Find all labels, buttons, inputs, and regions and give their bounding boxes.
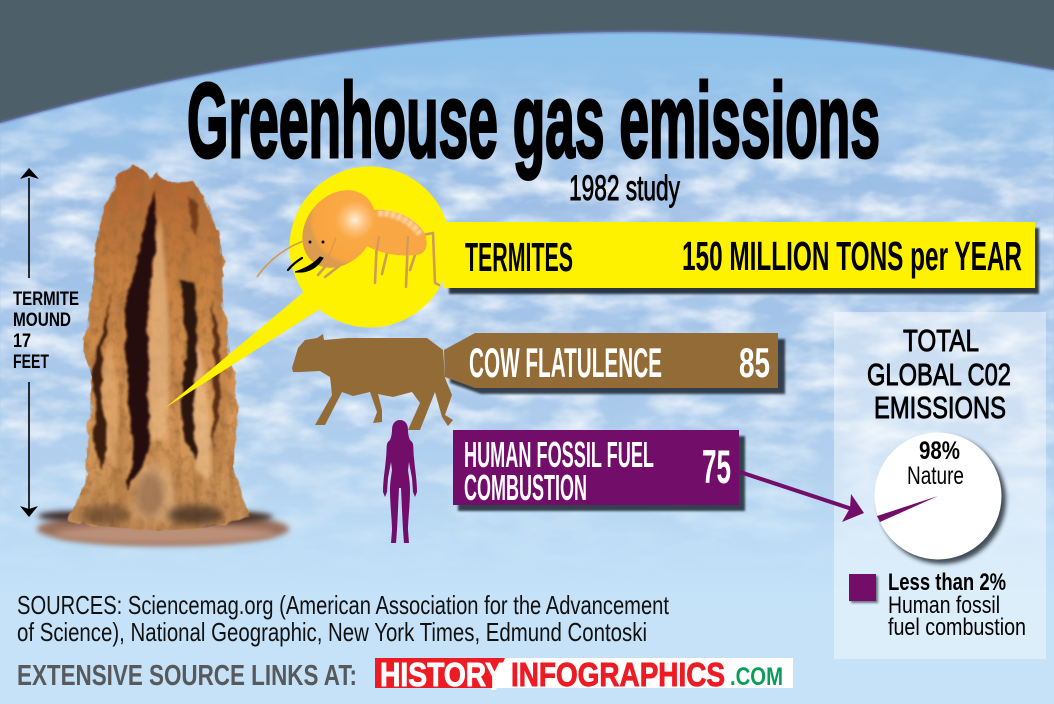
legend: Less than 2% [888, 569, 1006, 596]
mound height label: FEET [13, 352, 49, 373]
base shadow [136, 473, 164, 517]
panel title [867, 323, 1011, 425]
panel title: EMISSIONS [874, 390, 1006, 425]
lit ridges [148, 215, 169, 440]
termite mound [37, 160, 289, 546]
logo [375, 656, 793, 693]
legs [318, 233, 439, 287]
legend: Human fossil [888, 592, 1000, 619]
human value: 75 [702, 440, 731, 493]
sources: SOURCES: Sciencemag.org (American Association for the Advancement [17, 590, 670, 620]
legend [849, 569, 1026, 641]
logo: HISTORY [380, 656, 504, 693]
mandibles [295, 257, 323, 272]
pie chart: Nature [907, 462, 964, 490]
head [287, 176, 391, 282]
ground [37, 512, 289, 546]
human fossil fuel bar: COMBUSTION [464, 467, 587, 508]
panel: total global CO2 [834, 312, 1046, 659]
subtitle: 1982 study [569, 169, 680, 208]
sources [17, 590, 670, 647]
human fossil fuel bar [453, 430, 745, 511]
panel title: TOTAL [903, 323, 979, 358]
abdomen [362, 210, 427, 255]
sources: of Science), National Geographic, New York Times, Edmund Contoski [17, 617, 647, 647]
panel title: GLOBAL C02 [867, 357, 1011, 392]
mound height label: TERMITE [13, 289, 79, 310]
height arrow [20, 168, 39, 517]
front of legs over abdomen [377, 237, 408, 254]
cow bar: COW FLATULENCE [469, 339, 662, 386]
logo: .COM [730, 663, 783, 691]
pie chart: 98% [919, 437, 960, 465]
termites bar [443, 222, 1039, 294]
mound height label: 17 [13, 331, 31, 352]
termite callout circle and pointer [165, 166, 450, 408]
cow bar [444, 333, 785, 394]
icon: cow [292, 334, 453, 430]
termites label: TERMITES [465, 234, 573, 280]
cow value: 85 [739, 339, 770, 386]
pie chart [874, 432, 1006, 564]
icon: human [383, 420, 417, 543]
crevices [92, 190, 220, 492]
source links label: EXTENSIVE SOURCE LINKS AT: [17, 660, 357, 692]
background: space and earth [0, 0, 1054, 550]
logo: INFOGRAPHICS [511, 656, 725, 693]
human label: HUMAN FOSSIL FUEL [464, 434, 654, 475]
mound height label: MOUND [13, 310, 71, 331]
legend: fuel combustion [888, 614, 1026, 641]
icon: termite [257, 176, 439, 287]
mound height label [13, 289, 79, 373]
arrow to pie [740, 472, 864, 522]
